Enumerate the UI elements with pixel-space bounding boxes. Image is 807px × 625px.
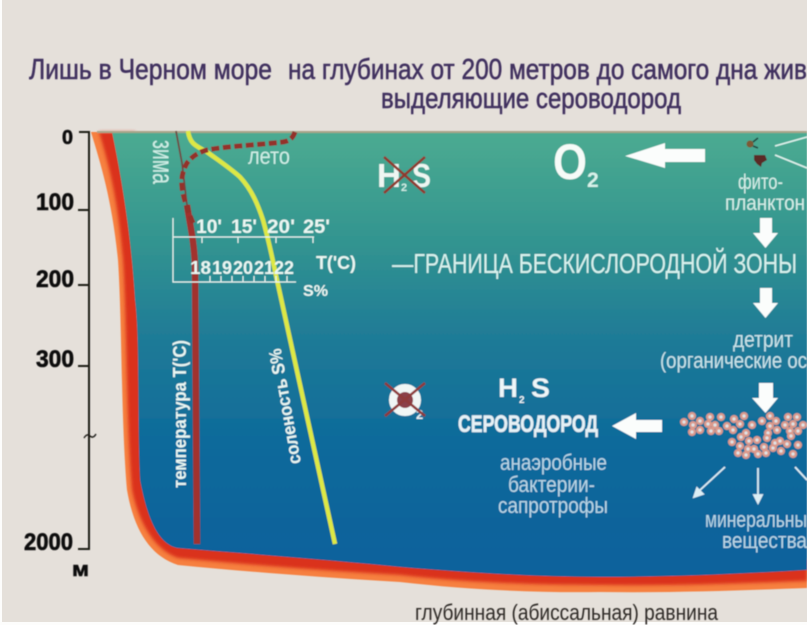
temperature and salinity scale: T('C) xyxy=(316,253,356,273)
seabed xyxy=(91,132,807,592)
H2S label: 2 xyxy=(519,395,525,406)
arrow: down 1 xyxy=(753,218,778,248)
icon: crossed H2S: S xyxy=(412,157,431,194)
title: Лишь в Черном море xyxy=(29,54,272,86)
temperature and salinity scale: 19 xyxy=(212,258,232,278)
salinity axis label: соленость S% xyxy=(265,347,305,466)
anaerobic bacteria label: анаэробные xyxy=(500,450,607,475)
H2S label xyxy=(498,373,550,406)
winter temperature line xyxy=(176,131,187,205)
temperature and salinity scale: 18 xyxy=(190,258,211,278)
icon: crossed O2: 2 xyxy=(416,407,423,422)
depth axis: 300 xyxy=(36,346,74,373)
sea water xyxy=(112,132,807,577)
phytoplankton label xyxy=(725,171,805,215)
temperature and salinity scale: 10' xyxy=(196,217,222,238)
depth axis: 0 xyxy=(62,127,73,149)
detritus label: детрит xyxy=(733,327,793,352)
temperature axis label: температура T('C) xyxy=(170,340,190,488)
icon: O2: O xyxy=(553,134,587,190)
temperature and salinity scale: 25' xyxy=(303,217,330,238)
H2S label: H xyxy=(498,373,518,403)
icon: crossed O2 xyxy=(385,383,425,422)
title xyxy=(29,54,807,115)
temperature and salinity scale: 20 xyxy=(233,258,253,278)
arrow: down 3 xyxy=(752,383,778,413)
label: zima: зима xyxy=(146,140,179,184)
depth axis: 100 xyxy=(36,189,74,216)
temperature and salinity scale: 22 xyxy=(274,258,294,278)
icon: crossed H2S: 2 xyxy=(401,182,407,194)
depth axis xyxy=(24,127,96,581)
detritus label xyxy=(660,327,807,373)
phytoplankton icons xyxy=(746,137,807,168)
hydrogen sulfide label: СЕРОВОДОРОД xyxy=(458,411,598,438)
arrows to mineral substances xyxy=(694,467,807,503)
anaerobic bacteria label: сапротрофы xyxy=(498,493,608,518)
arrow: to hydrogen sulfide xyxy=(612,413,662,439)
temperature and salinity scale xyxy=(173,217,356,300)
title: выделяющие сероводород xyxy=(381,83,681,115)
temperature curve xyxy=(187,205,197,544)
temperature and salinity scale: 21 xyxy=(254,258,274,278)
depth axis: 2000 xyxy=(24,529,73,556)
mineral substances label xyxy=(705,507,807,553)
depth axis: м xyxy=(72,559,89,581)
icon: crossed H2S xyxy=(377,157,431,194)
temperature and salinity scale: 15' xyxy=(231,217,257,238)
temperature and salinity scale: S% xyxy=(303,283,328,300)
detritus particles xyxy=(681,413,806,458)
label: leto: лето xyxy=(248,143,290,169)
icon: crossed H2S: H xyxy=(377,157,401,194)
phytoplankton label: фито- xyxy=(738,171,783,194)
summer temperature curve xyxy=(182,132,295,223)
salinity curve xyxy=(188,131,335,544)
arrow: to O2 xyxy=(625,143,705,168)
abyssal plain label: глубинная (абиссальная) равнина xyxy=(415,600,719,625)
anaerobic bacteria label xyxy=(498,450,608,518)
arrow: down 2 xyxy=(753,288,778,318)
temperature and salinity scale: 20' xyxy=(267,217,295,238)
icon: O2: 2 xyxy=(587,169,599,192)
anaerobic bacteria label: бактерии- xyxy=(508,472,595,497)
depth axis: 200 xyxy=(36,266,74,293)
H2S label: S xyxy=(531,373,550,403)
